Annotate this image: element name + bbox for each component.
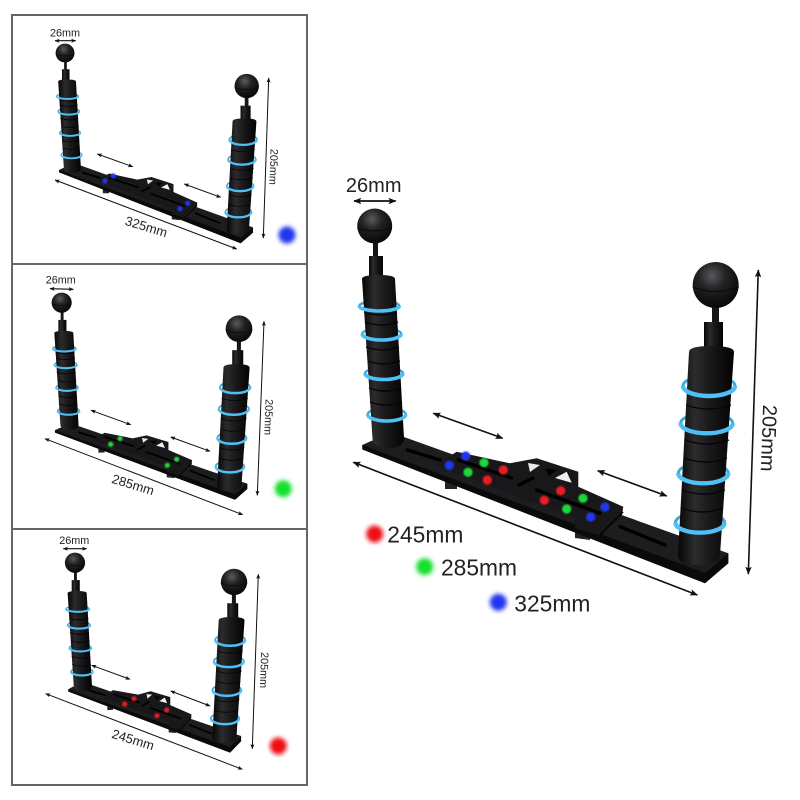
arrow: diameter	[354, 200, 396, 202]
label: 205mm: 205mm	[756, 404, 780, 472]
slider markers: green	[463, 458, 588, 514]
right post with ball and rings	[676, 262, 739, 565]
arrow: height	[252, 574, 258, 749]
left post 325mm	[56, 44, 82, 173]
small blue markers	[102, 173, 190, 211]
arrow: left slider	[92, 665, 130, 679]
label: 285mm: 285mm	[110, 471, 156, 498]
legend: 325mm blue: 325mm	[514, 591, 590, 617]
arrow: length	[55, 180, 237, 249]
panel: 245mm configuration	[12, 529, 307, 785]
arrow: diameter	[55, 40, 76, 42]
slider markers: blue	[445, 451, 610, 522]
rig base 325mm	[59, 166, 253, 243]
colour key: blue dot	[278, 226, 296, 244]
arrow: height	[263, 78, 269, 238]
colour key: green dot	[275, 480, 292, 497]
arrow: left slider	[97, 154, 133, 167]
label: 205mm: 205mm	[266, 149, 280, 185]
right post 325mm	[225, 74, 259, 234]
arrow: right slider	[171, 691, 210, 706]
label: 26mm: 26mm	[50, 28, 80, 40]
left post 245mm	[65, 553, 93, 691]
arrow: height	[748, 270, 758, 574]
rig base 245mm	[68, 674, 241, 763]
right post 285mm	[216, 315, 252, 491]
label: 325mm: 325mm	[123, 213, 169, 240]
label: 26mm: 26mm	[46, 274, 76, 286]
arrow: length	[353, 462, 697, 595]
arrow: height	[257, 321, 264, 495]
label: 205mm: 205mm	[257, 652, 270, 688]
legend: 245mm red: 245mm	[387, 522, 463, 548]
arrow: right slider	[184, 184, 221, 197]
arrow: length	[46, 694, 242, 769]
arrow: left slider	[91, 410, 131, 425]
panel: 285mm configuration	[12, 264, 307, 529]
base plate with sliders and bracket	[362, 437, 728, 583]
left post 285mm	[52, 293, 79, 430]
left post with ball and rings	[357, 208, 406, 448]
arrow: diameter	[63, 548, 87, 550]
slider markers: red	[483, 465, 565, 505]
colour key: red dot	[270, 738, 287, 754]
rig base 285mm	[55, 422, 247, 504]
small green markers	[108, 436, 179, 468]
label: 26mm: 26mm	[59, 535, 89, 547]
label: 205mm: 205mm	[261, 399, 275, 435]
small red markers	[122, 696, 169, 718]
right post 245mm	[211, 569, 247, 743]
arrow: length	[45, 439, 243, 515]
legend: 285mm green: 285mm	[441, 555, 517, 581]
panel: 325mm configuration	[12, 15, 307, 264]
panel: main combined diagram	[346, 175, 780, 617]
label: 245mm: 245mm	[110, 726, 156, 753]
arrow: right slider	[171, 437, 210, 451]
arrow: diameter	[50, 288, 73, 290]
arrow: right slider	[598, 471, 667, 496]
label: 26mm: 26mm	[346, 175, 401, 197]
arrow: left slider	[433, 413, 503, 438]
